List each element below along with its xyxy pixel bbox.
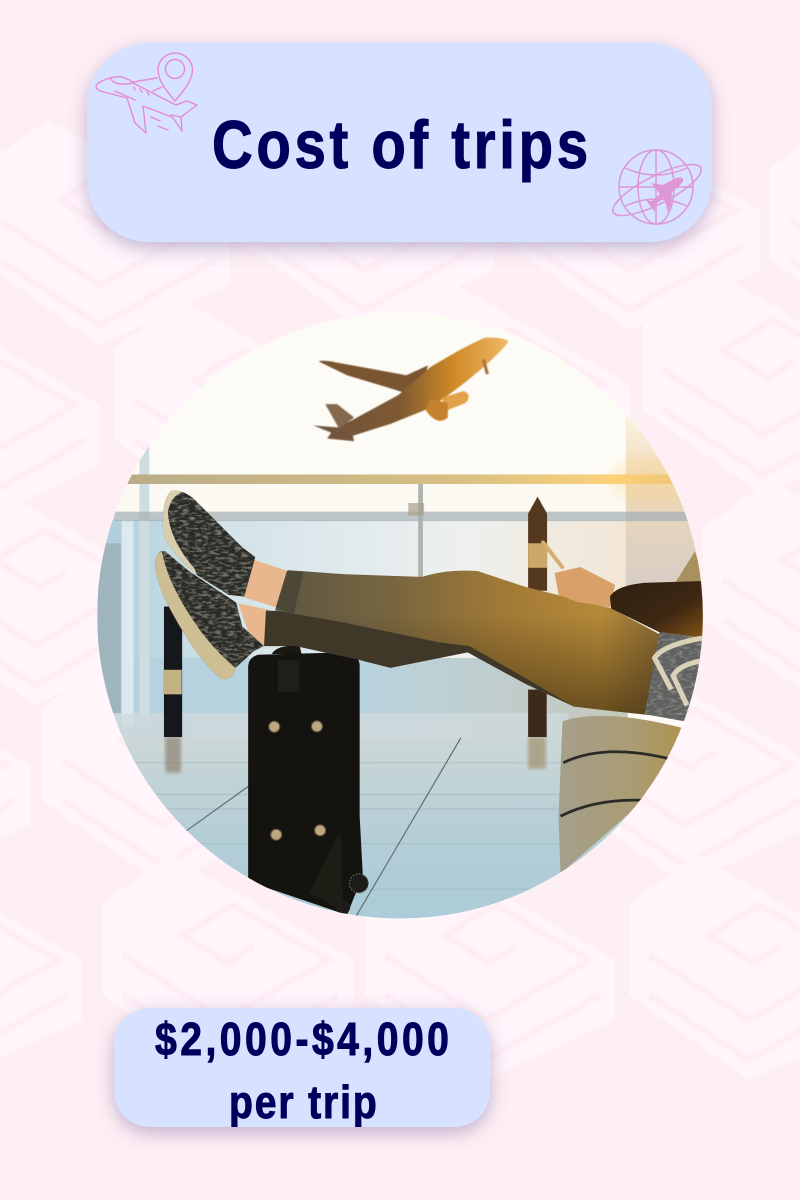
skin: ankles <box>238 560 288 646</box>
phone and hand <box>543 542 615 607</box>
price text <box>155 1014 452 1129</box>
photo: traveller at airport <box>90 310 711 930</box>
title text: Cost of trips <box>212 107 592 183</box>
sky and window <box>113 314 683 726</box>
shoes <box>155 490 264 679</box>
icon: airplane and location pin <box>96 53 197 133</box>
price text: $2,000-$4,000 <box>155 1014 452 1066</box>
price text: per trip <box>229 1077 379 1129</box>
icon: globe with airplane <box>607 150 707 225</box>
suitcase <box>248 645 368 915</box>
jacket and seat <box>559 551 707 873</box>
rivets <box>269 721 326 840</box>
legs <box>264 570 659 715</box>
handrail <box>126 474 679 484</box>
glass barrier <box>90 409 710 737</box>
airplane <box>313 338 508 441</box>
price panel <box>114 1008 490 1129</box>
title panel <box>87 43 712 242</box>
floor <box>122 736 678 918</box>
sunlight glow <box>607 455 680 504</box>
posts <box>163 497 547 737</box>
